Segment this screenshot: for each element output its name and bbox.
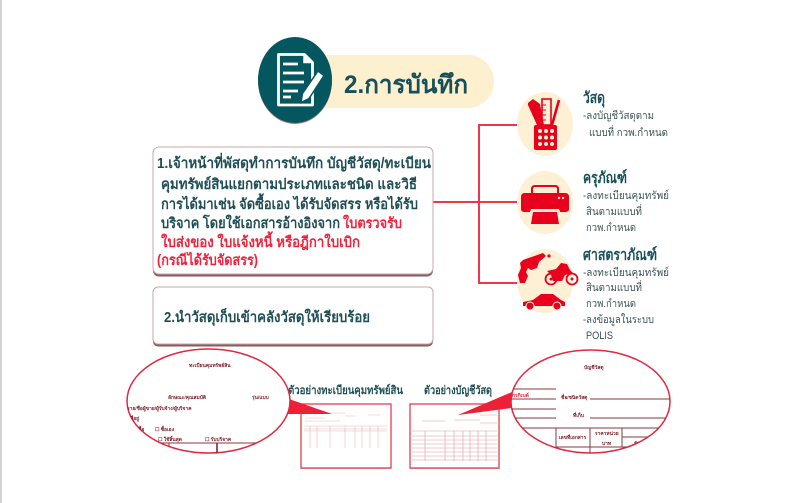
step 1 text: การได้มาเช่น จัดซื้อเอง ได้รับจัดสรร หรือได้รับ [161,193,418,213]
text: weapons: -ลงข้อมูลในระบบ [583,313,654,326]
callout: asset register magnifier: ☐ ซื้อเอง [155,424,175,433]
text: equipment: สินตามแบบที่ [586,204,642,218]
step 1 text [157,152,431,269]
text: equipment [583,169,669,234]
callout: asset register magnifier: ราย/ชื่อผู้ขาย/ผู้รับจ้าง/ผู้บริจาค [127,404,191,413]
text: equipment: ครุภัณฑ์ [583,169,627,188]
title banner [258,37,494,124]
callout: asset register magnifier: ซื้อ [138,424,144,433]
title pill [300,55,494,108]
step 1 text: 1.เจ้าหน้าที่พัสดุทำการบันทึก บัญชีวัสดุ/ทะเบียน [157,152,431,172]
callout: asset register magnifier [127,349,332,455]
callout: asset register magnifier: ลักษณะ/คุณสมบัติ [168,394,206,401]
step 1 text: คุมทรัพย์สินแยกตามประเภทและชนิด และวิธี [161,175,417,193]
callout: asset register magnifier: รุ่น/แบบ [252,395,269,401]
text: materials: แบบที่ กวพ.กำหนด [589,125,668,139]
text: equipment: -ลงทะเบียนคุมทรัพย์ [583,189,669,202]
panel: step 1 text box [153,147,433,276]
callout: materials ledger magnifier [458,350,670,455]
icon: printer [517,171,573,234]
step 1 text: (กรณีได้รับจัดสรร) [157,251,258,269]
text: weapons: กวพ.กำหนด [586,298,636,310]
text: materials [583,90,668,139]
callout: materials ledger magnifier: ที่เก็บ [573,411,584,419]
text: weapons: -ลงทะเบียนคุมทรัพย์ [583,266,669,279]
caption: asset register example: ตัวอย่างทะเบียนคุมทรัพย์สิน [288,383,403,398]
callout: asset register magnifier: ☐ รับบริจาค [205,436,231,443]
callout: materials ledger magnifier: บัญชีวัสดุ [584,364,604,371]
text: weapons: ศาสตราภัณฑ์ [583,246,657,264]
thumbnail: materials ledger form [410,404,499,469]
callout: materials ledger magnifier: บาท [602,441,612,447]
caption: materials ledger example: ตัวอย่างบัญชีวัสดุ [424,384,492,398]
text: materials: -ลงบัญชีวัสดุตาม [583,109,654,122]
title text: 2.การบันทึก [344,71,468,99]
panel: step 2 text box [153,287,433,346]
callout: materials ledger magnifier: กรกิเบด์ [512,392,529,399]
step 1 text: ใบส่งของ ใบแจ้งหนี้ หรือฎีกาใบเบิก [161,231,360,251]
callout: materials ledger magnifier: รับ [634,440,640,447]
callout: materials ledger magnifier: เลขที่เอกสาร [559,433,587,441]
step 1 text: บริจาค โดยใช้เอกสารอ้างอิงจาก [161,214,340,232]
text: weapons [583,246,669,342]
callout: materials ledger magnifier: ชื่อ/ชนิดวัสดุ [561,393,587,401]
text: equipment: กวพ.กำหนด [586,222,636,234]
text: weapons: POLIS [586,330,613,342]
step 1 text: ใบตรวจรับ [343,214,402,232]
callout: materials ledger magnifier: ราคาหน่วย [595,431,619,437]
text: materials: วัสดุ [583,90,605,108]
step 2 text: 2.นำวัสดุเก็บเข้าคลังวัสดุให้เรียบร้อย [164,307,370,326]
icon: pencil cup [517,92,573,156]
title icon: document and pen [258,37,332,124]
icon: gun, motorcycle and car [517,249,578,313]
callout: asset register magnifier: ☐ ใช้สิ้นสุด [158,434,182,443]
callout: asset register magnifier: ทะเบียนคุมทรัพย์สิน [189,362,231,369]
text: weapons: สินตามแบบที่ [586,280,642,294]
thumbnail: asset register form [301,404,391,469]
callout: asset register magnifier: ที่อยู่ [130,414,139,423]
connector lines [433,125,518,283]
